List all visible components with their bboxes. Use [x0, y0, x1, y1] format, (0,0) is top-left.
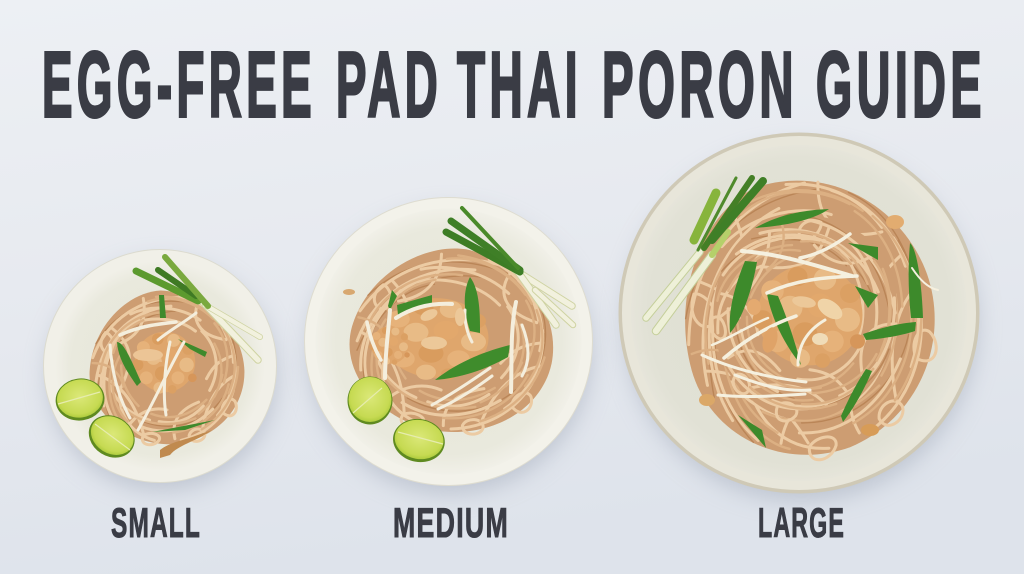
- large noodle mound: [646, 137, 969, 496]
- small plate of pad thai: [44, 250, 276, 490]
- title: [42, 32, 986, 136]
- label: medium: MEDIUM: [393, 499, 509, 546]
- large green leaves: [730, 209, 923, 448]
- large bean sprouts: [702, 234, 938, 397]
- medium lime wedges: [348, 376, 448, 466]
- label: small: SMALL: [111, 499, 201, 546]
- large plate of pad thai: [618, 132, 980, 500]
- large scallions: [646, 178, 763, 331]
- small green leaves: [117, 295, 215, 432]
- medium scallions: [446, 208, 573, 325]
- medium noodle mound: [332, 232, 574, 450]
- title: EGG-FREE: [42, 32, 316, 136]
- large peanuts: [699, 215, 904, 436]
- medium plate of pad thai: [304, 198, 592, 493]
- medium peanuts: [343, 289, 465, 350]
- title: PAD: [336, 32, 442, 136]
- title: PORON: [602, 32, 798, 136]
- small bean sprouts: [110, 313, 196, 430]
- small crispy bits: [160, 430, 212, 458]
- small peanut: [133, 349, 163, 361]
- small lime wedges: [53, 375, 143, 466]
- medium green leaves: [388, 277, 510, 380]
- label: large: LARGE: [758, 499, 845, 546]
- small noodle mound: [90, 291, 244, 445]
- medium bean sprouts: [367, 302, 528, 409]
- title: THAI: [457, 32, 582, 136]
- small scallions: [136, 257, 260, 360]
